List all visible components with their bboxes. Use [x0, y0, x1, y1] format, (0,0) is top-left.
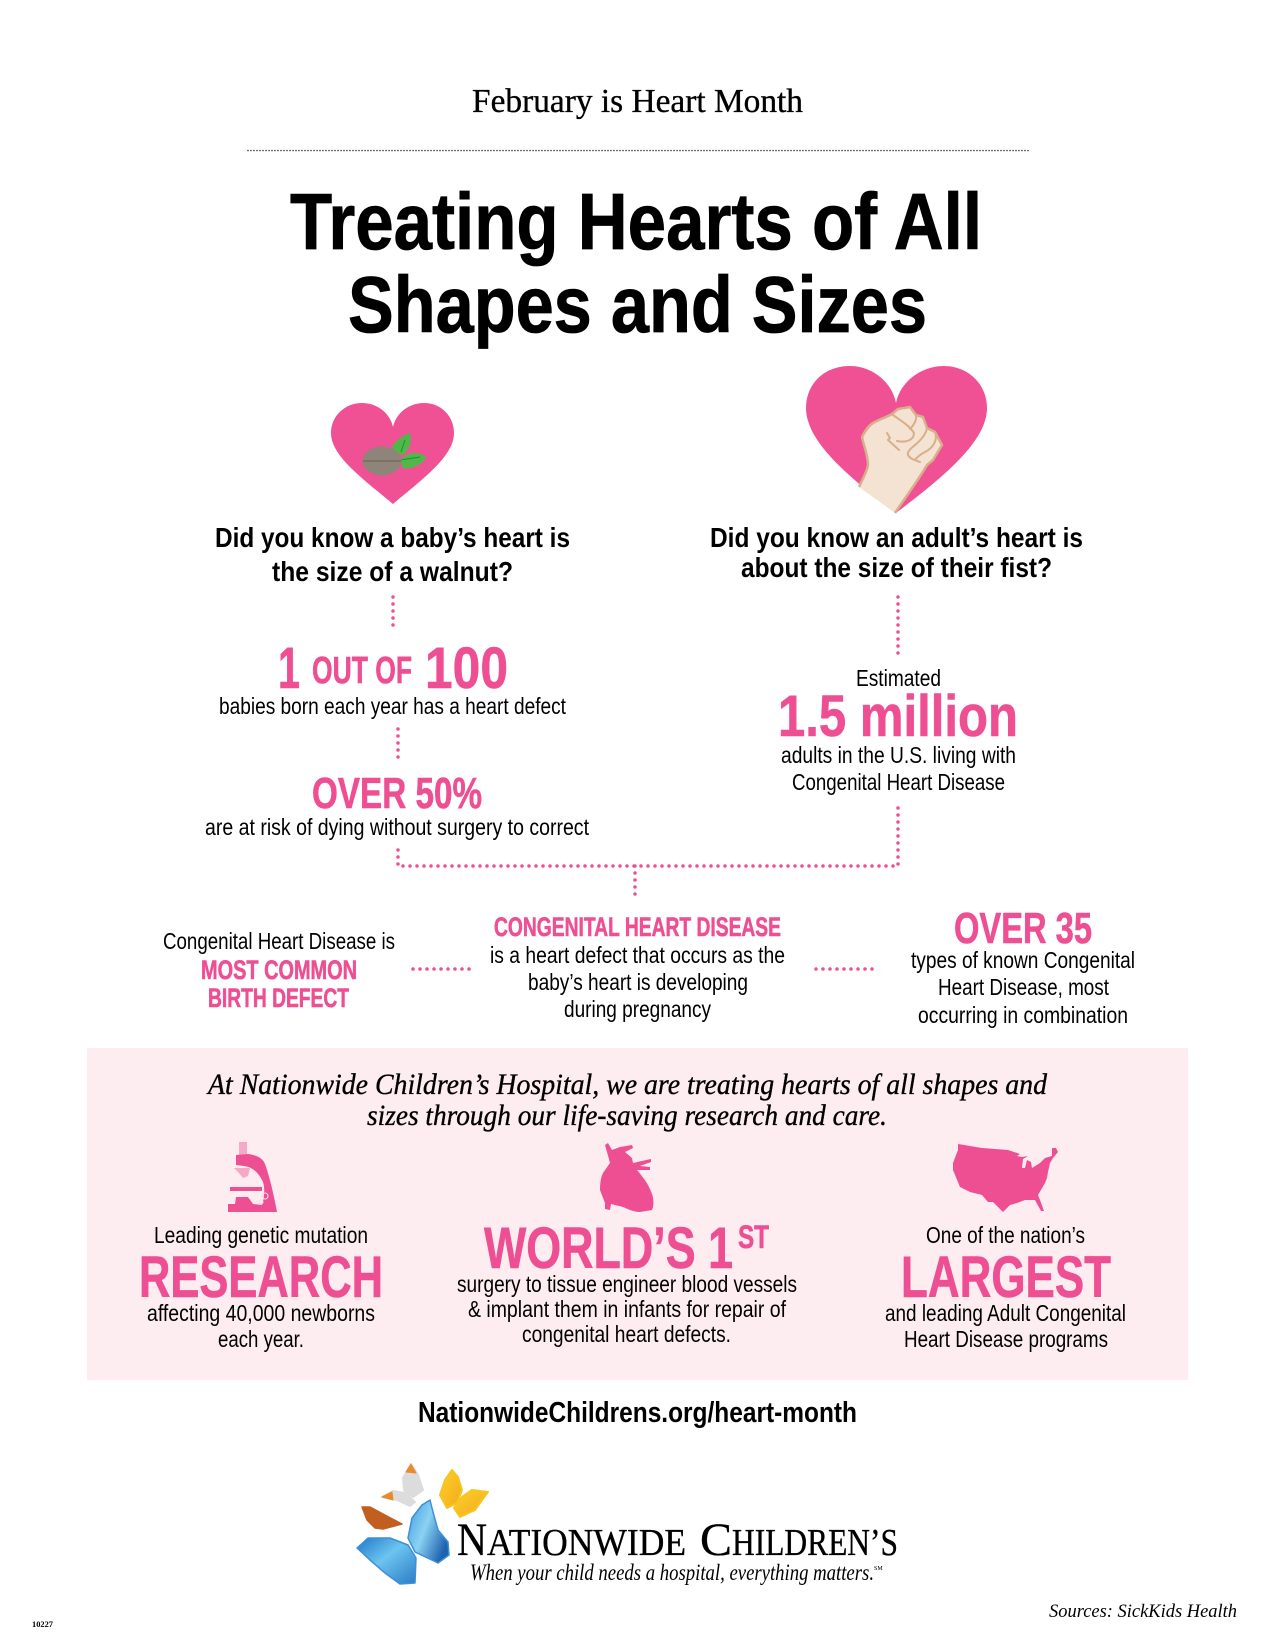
title: Treating Hearts of All: [290, 177, 982, 266]
panel heading: At Nationwide Children’s Hospital, we are treating hearts of all shapes and: [206, 1068, 1048, 1101]
stat: over 35: Heart Disease, most: [938, 974, 1109, 1000]
logo wordmark: N: [457, 1514, 487, 1566]
panel heading: [206, 1068, 1048, 1132]
stat: over 35: types of known Congenital: [911, 947, 1135, 973]
stat: 1 out of 100: 100: [425, 636, 508, 701]
text: largest: One of the nation’s: [926, 1222, 1085, 1248]
logo tagline: SM: [874, 1566, 883, 1572]
page header: February is Heart Month: February is Heart Month: [472, 83, 803, 120]
icon: heart with fist: [806, 366, 987, 513]
question: adult heart size: about the size of their fist?: [741, 552, 1052, 583]
question: adult heart size: [710, 522, 1083, 583]
text: research: affecting 40,000 newborns: [147, 1300, 375, 1326]
question: baby heart size: Did you know a baby’s heart is: [215, 522, 570, 553]
stat: 1 out of 100: 1: [278, 636, 300, 701]
logo wordmark: HILDREN’S: [732, 1522, 898, 1564]
stat: 1 out of 100: OUT OF: [312, 650, 412, 692]
text: world's first: surgery to tissue engineer blood vessels: [457, 1271, 797, 1297]
text: largest: and leading Adult Congenital: [885, 1300, 1126, 1326]
stat: over 35: occurring in combination: [918, 1002, 1128, 1028]
stat: most common birth defect: [163, 928, 395, 1013]
text: research: [139, 1222, 383, 1352]
definition: congenital heart disease: CONGENITAL HEART DISEASE: [494, 912, 781, 942]
stat: most common birth defect: Congenital Heart Disease is: [163, 928, 395, 954]
stat: most common birth defect: BIRTH DEFECT: [208, 983, 349, 1013]
text: research: Leading genetic mutation: [154, 1222, 368, 1248]
text: world's first: ST: [738, 1219, 769, 1255]
panel: adult heart column: [710, 366, 1083, 795]
text: largest: Heart Disease programs: [904, 1326, 1108, 1352]
connector: dotted lines joining columns: [398, 808, 898, 901]
logo wordmark: ATIONWIDE: [487, 1522, 686, 1564]
sources note: Sources: SickKids Health: [1049, 1601, 1237, 1622]
text: largest: LARGEST: [901, 1245, 1111, 1310]
stat: 1 out of 100: [219, 636, 566, 719]
logo wordmark: [457, 1514, 898, 1566]
stat: over 50%: [205, 769, 590, 840]
stat: 1.5 million: [778, 665, 1018, 795]
title: Shapes and Sizes: [348, 260, 927, 349]
stat: most common birth defect: MOST COMMON: [201, 955, 357, 985]
text: world's first: & implant them in infants for repair of: [468, 1296, 787, 1322]
document number: 10227: [32, 1620, 53, 1629]
stat: 1.5 million: Estimated: [856, 665, 941, 691]
stat: over 35: [911, 904, 1135, 1028]
panel heading: sizes through our life-saving research and care.: [367, 1099, 887, 1132]
text: world's first: [457, 1216, 797, 1347]
text: research: RESEARCH: [139, 1245, 383, 1310]
logo: Nationwide Children's: [357, 1464, 898, 1585]
panel: hospital research and care: [87, 1048, 1188, 1380]
icon: anatomical heart: [600, 1143, 653, 1212]
stat: 1 out of 100: babies born each year has a heart defect: [219, 693, 566, 719]
text: research: each year.: [218, 1326, 304, 1352]
icon: heart with walnut: [331, 403, 454, 504]
text: world's first: congenital heart defects.: [522, 1321, 731, 1347]
stat: 1.5 million: Congenital Heart Disease: [792, 769, 1005, 795]
logo tagline: When your child needs a hospital, everything matters.: [470, 1560, 874, 1585]
question: baby heart size: [215, 522, 570, 587]
title: [290, 177, 982, 349]
text: largest: [885, 1222, 1126, 1352]
definition: congenital heart disease: is a heart defect that occurs as the: [490, 942, 785, 968]
icon: butterflies: [357, 1464, 488, 1584]
question: adult heart size: Did you know an adult’s heart is: [710, 522, 1083, 553]
stat: over 50%: are at risk of dying without surgery to correct: [205, 814, 590, 840]
definition: congenital heart disease: [490, 912, 785, 1022]
logo wordmark: C: [700, 1514, 732, 1566]
panel: baby heart column: [205, 403, 590, 840]
question: baby heart size: the size of a walnut?: [272, 556, 513, 587]
stat: 1.5 million: adults in the U.S. living with: [781, 742, 1016, 768]
definition: congenital heart disease: during pregnancy: [564, 996, 711, 1022]
icon: map of the USA: [953, 1144, 1058, 1212]
stat: over 50%: OVER 50%: [312, 769, 482, 818]
icon: microscope: [228, 1142, 277, 1212]
website url: NationwideChildrens.org/heart-month: [418, 1397, 857, 1429]
text: world's first: WORLD’S 1: [484, 1216, 733, 1281]
stat: 1.5 million: 1.5 million: [778, 684, 1018, 749]
stat: over 35: OVER 35: [954, 904, 1092, 953]
definition: congenital heart disease: baby’s heart is developing: [528, 969, 748, 995]
